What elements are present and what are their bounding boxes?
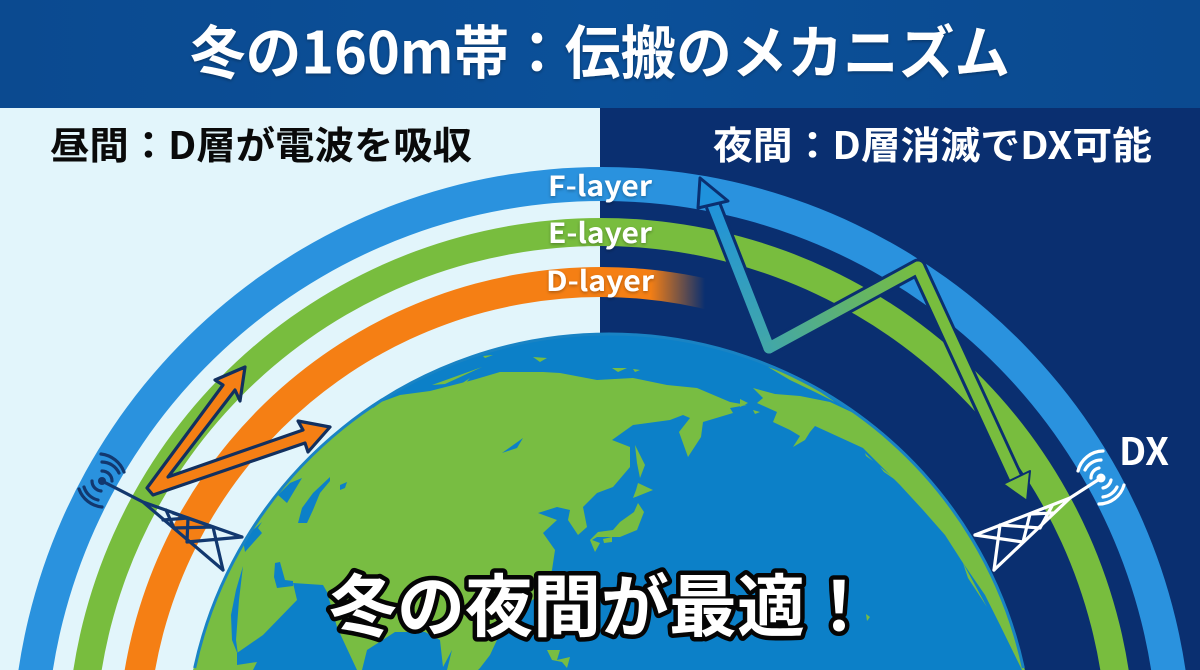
sea: Red Sea [231, 566, 243, 655]
header bar [0, 0, 1200, 108]
land: arctic islands [432, 355, 987, 607]
lake: Baikal [502, 438, 523, 453]
land: Philippines and Pacific islands [547, 614, 870, 668]
sea: Black Sea [243, 522, 262, 552]
antenna ball [1096, 474, 1106, 482]
layer label: F: F-layer [548, 165, 653, 205]
mast and legs [102, 481, 242, 570]
land: Eurasia and Africa [150, 372, 747, 670]
E layer band [73, 218, 1129, 670]
callout: best at winter night: 冬の夜間が最適！ [329, 552, 873, 651]
land: Shikoku [603, 537, 612, 543]
heading: daytime: 昼間：D層が電波を吸収 [50, 115, 472, 170]
mast and legs [975, 478, 1101, 570]
lattice [163, 510, 242, 570]
antenna ball [98, 477, 106, 485]
arrow: nighttime multi-hop DX path [698, 178, 1030, 501]
sea: Persian Gulf [274, 562, 293, 588]
layer label: D: D-layer [546, 260, 655, 300]
arrowhead: down [1003, 471, 1030, 501]
sea: Baltic [278, 478, 302, 503]
land: Alaska and North America rim [753, 388, 1032, 670]
earth globe [150, 333, 1032, 670]
land: Honshu [590, 503, 644, 552]
label: DX: DX [1119, 421, 1169, 476]
F layer band [18, 167, 1186, 670]
panel: nighttime background [600, 108, 1200, 670]
lattice [975, 506, 1053, 570]
tower: daytime station [79, 454, 242, 570]
sea: Aral [340, 482, 347, 490]
globe rim [195, 334, 1023, 668]
tower: DX station [975, 451, 1124, 570]
arrowhead: up [698, 178, 728, 208]
land: Hokkaido [633, 483, 653, 498]
ocean [193, 333, 1025, 670]
layer label: E: E-layer [548, 212, 653, 252]
sea: arctic inlet [373, 402, 382, 408]
signal waves [1078, 451, 1124, 504]
panel: daytime background [0, 108, 600, 670]
land: Sakhalin [635, 445, 645, 478]
D layer band fading out at night [125, 267, 1077, 670]
signal waves [79, 454, 124, 507]
seas on the continents [231, 402, 523, 653]
arrow: daytime signals absorbed [147, 367, 330, 495]
hop 2 [769, 267, 918, 348]
sea: Caspian [298, 477, 330, 523]
heading: nighttime: 夜間：D層消滅でDX可能 [713, 115, 1152, 170]
title: 冬の160m帯：伝搬のメカニズム [190, 6, 1010, 90]
continents [150, 355, 1032, 670]
hop 1 [713, 205, 769, 348]
hop 3 [918, 267, 1017, 482]
hop outline [713, 205, 1015, 478]
